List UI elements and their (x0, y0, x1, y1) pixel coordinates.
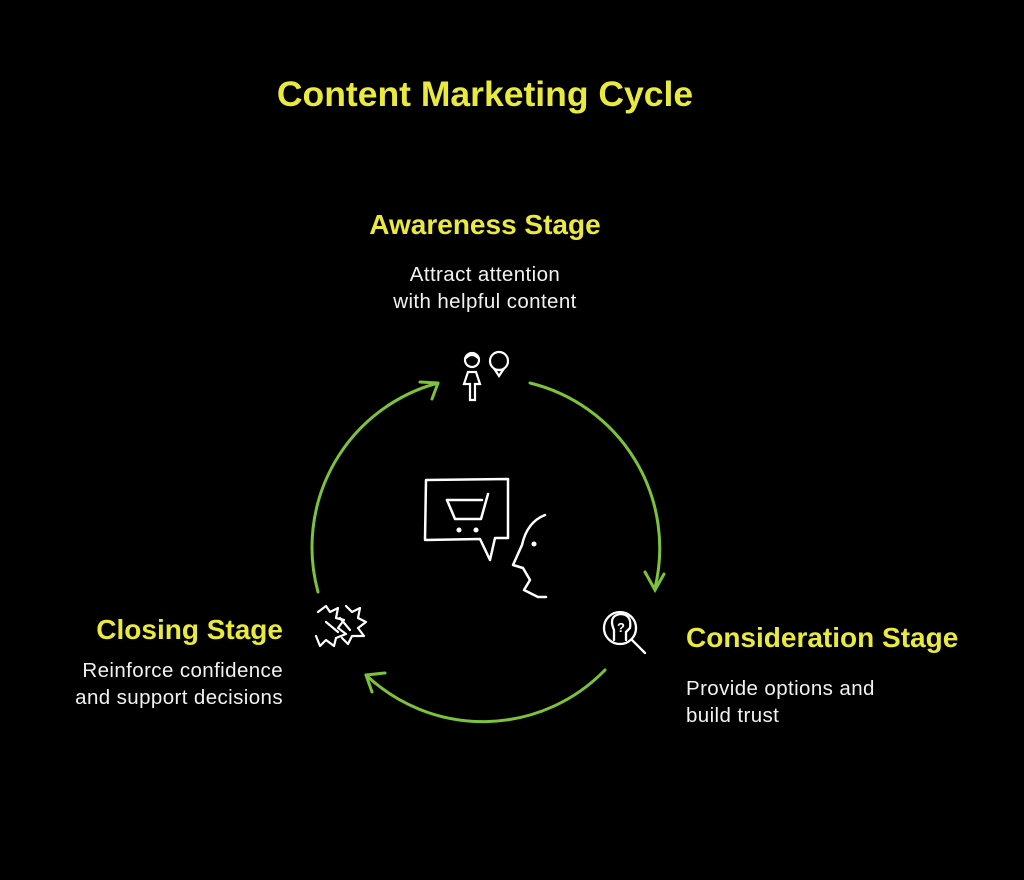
arrow: awareness to consideration (530, 383, 664, 590)
awareness text: with helpful content (392, 290, 577, 313)
arrow: consideration to closing (366, 670, 605, 722)
closing text: Reinforce confidence (82, 659, 283, 682)
consideration text (686, 677, 875, 727)
awareness text: Attract attention (410, 263, 560, 286)
arrow: closing to awareness (312, 382, 438, 592)
consideration text: Provide options and (686, 677, 875, 700)
consideration heading: Consideration Stage (686, 622, 958, 653)
icon: consideration magnifier head: ? (617, 620, 625, 635)
closing text (75, 659, 283, 709)
icon: closing handshake gears (316, 606, 366, 646)
closing heading: Closing Stage (96, 614, 283, 645)
consideration text: build trust (686, 704, 779, 727)
closing text: and support decisions (75, 686, 283, 709)
title: Content Marketing Cycle (277, 74, 693, 114)
awareness heading: Awareness Stage (369, 209, 601, 240)
icon: person and lightbulb (464, 352, 508, 400)
icon: chat cart and face (425, 479, 546, 597)
icon: consideration magnifier head (604, 612, 645, 653)
awareness text (392, 263, 577, 313)
